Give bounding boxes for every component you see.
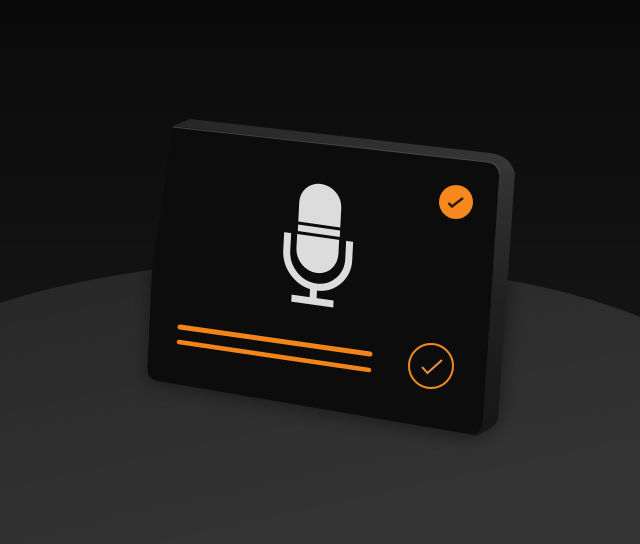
microphone capsule top [298, 181, 342, 227]
microphone band [298, 225, 340, 237]
contact shadow [148, 280, 509, 440]
front face highlight edge [173, 127, 500, 174]
device [147, 119, 515, 436]
line one [180, 327, 370, 354]
filled orange check badge [439, 185, 473, 219]
microphone stem [310, 286, 317, 299]
device right side [468, 172, 515, 436]
microphone icon [284, 180, 352, 309]
device front face [147, 127, 499, 434]
microphone capsule bottom [295, 234, 339, 276]
line two [179, 342, 369, 370]
microphone holder [285, 233, 350, 291]
illustration: voice recording device on a pedestal [0, 119, 640, 544]
orange progress lines [179, 327, 370, 370]
outlined check badge [409, 344, 453, 388]
device top edge [173, 119, 515, 178]
microphone base [291, 295, 334, 308]
pedestal floor [0, 263, 640, 544]
outlined check mark [422, 360, 442, 373]
check mark [448, 198, 463, 206]
